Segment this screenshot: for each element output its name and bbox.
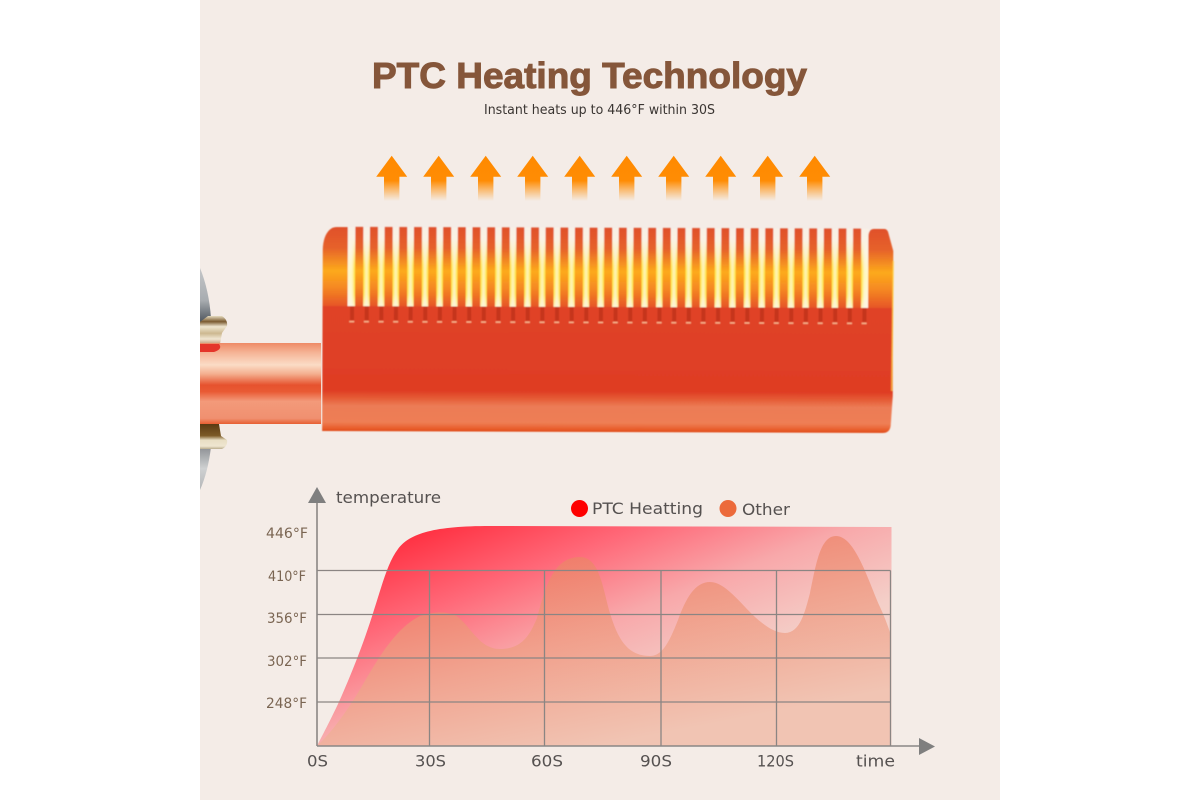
yellow glow around teeth	[355, 227, 861, 313]
left end block	[323, 227, 348, 311]
comb head	[322, 227, 893, 433]
x axis	[317, 738, 935, 755]
hair tool illustration	[200, 227, 893, 490]
gaps between teeth	[347, 227, 869, 311]
x axis labels	[307, 752, 895, 770]
legend: other	[720, 500, 790, 519]
heat arrows	[376, 156, 830, 201]
y axis labels: 302°F	[267, 654, 307, 670]
handle shaft	[200, 343, 321, 424]
x axis labels: 30S	[415, 752, 446, 770]
screw nuts	[200, 316, 227, 449]
y axis labels: 356°F	[267, 611, 307, 627]
background panel	[200, 0, 1000, 800]
x axis labels: 0S	[307, 752, 328, 770]
x axis labels: 120S	[757, 752, 794, 770]
temperature chart	[266, 487, 935, 770]
comb body	[322, 306, 893, 433]
PTC heating area	[317, 526, 892, 746]
x axis labels: 90S	[640, 752, 672, 770]
clamp blades at left edge	[200, 268, 211, 490]
y axis labels: 410°F	[268, 569, 306, 585]
subtitle: Instant heats up to 446°F within 30S	[484, 103, 715, 118]
x axis labels: time	[856, 752, 895, 770]
legend: other: Other	[742, 500, 790, 519]
right end block	[868, 229, 893, 313]
legend	[571, 499, 790, 519]
y axis labels: 248°F	[266, 696, 307, 712]
right edge glow	[892, 261, 893, 391]
other heating area	[317, 536, 891, 746]
tooth root slots	[350, 313, 867, 315]
title: PTC Heating Technology	[372, 55, 807, 96]
y axis labels: 446°F	[266, 526, 308, 542]
legend: PTC heating: PTC Heatting	[592, 499, 703, 518]
red screw base	[200, 344, 220, 352]
comb teeth	[355, 227, 861, 313]
y axis title: temperature	[336, 488, 441, 507]
x axis labels: 60S	[531, 752, 563, 770]
y axis labels	[266, 526, 308, 712]
tooth root highlights	[349, 322, 867, 323]
bottom edge glow	[470, 430, 690, 432]
y axis	[308, 487, 326, 746]
